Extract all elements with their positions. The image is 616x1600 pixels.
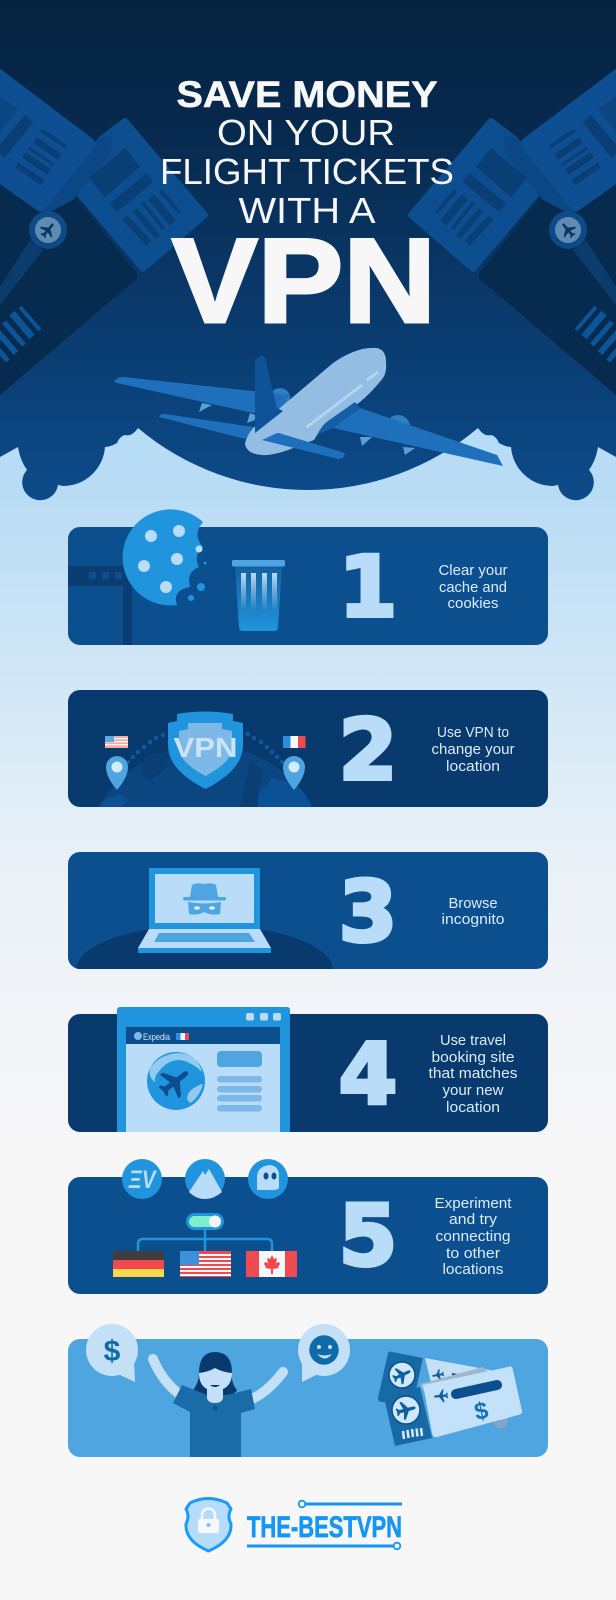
- step 1 text: cache and: [439, 579, 507, 596]
- step 3 text: [442, 895, 504, 928]
- step 5 text: [434, 1195, 512, 1278]
- step 5 text: locations: [442, 1261, 504, 1278]
- icon: globe with plane: [147, 1052, 205, 1110]
- Expedia logo: [134, 1032, 171, 1043]
- back ticket plane: [431, 1369, 445, 1381]
- panel: step 1: [68, 509, 548, 646]
- title: [160, 73, 454, 348]
- person celebrating: [153, 1352, 283, 1457]
- step 1 text: [438, 562, 508, 612]
- shirt: [173, 1385, 255, 1457]
- right boarding pass illustration: [411, 61, 616, 395]
- title: WITH A: [238, 190, 376, 231]
- step 4 text: location: [446, 1099, 500, 1116]
- step 5 text: Experiment: [434, 1195, 512, 1212]
- tail fin: [255, 355, 283, 433]
- icon: cookie: [123, 509, 206, 605]
- ticket fold band: [420, 1367, 488, 1392]
- browser window: [117, 1007, 290, 1132]
- title: VPN: [172, 214, 436, 348]
- step 4 text: Use travel: [440, 1032, 506, 1049]
- step 1 text: cookies: [448, 595, 498, 612]
- logo: The-BestVPN: [186, 1498, 402, 1551]
- step 2 text: change your: [432, 741, 515, 758]
- icon: ExpressVPN badge: ΞV: [128, 1166, 157, 1194]
- circuit line bottom: [247, 1543, 400, 1549]
- engines and fins: [199, 388, 415, 455]
- step 5 text: to other: [446, 1245, 500, 1262]
- plane badge bottom: [392, 1396, 420, 1424]
- front stabilizer: [262, 433, 345, 459]
- step 5 text: and try: [449, 1211, 498, 1228]
- dollar speech bubble: $: [104, 1335, 121, 1368]
- number 5: 5: [339, 1187, 397, 1285]
- rear ticket: [42, 121, 205, 269]
- face and neck: [199, 1368, 232, 1403]
- destination bar: [456, 1385, 497, 1394]
- panel: step 5: [68, 1159, 548, 1294]
- dollar speech bubble: [86, 1324, 138, 1382]
- number 2: 2: [339, 701, 397, 799]
- icon: trash bin: [232, 560, 285, 631]
- windows: [307, 372, 378, 427]
- stub barcode: [403, 1428, 422, 1439]
- icon: laptop: [138, 868, 271, 953]
- step 3 text: incognito: [442, 911, 504, 928]
- title: ON YOUR: [217, 112, 395, 153]
- dotted route: [126, 732, 284, 764]
- icon: mountain VPN badge: [185, 1159, 225, 1199]
- number 3: 3: [339, 863, 397, 961]
- icon: US flag: [105, 736, 128, 748]
- toggle switch: [186, 1213, 224, 1230]
- arms: [153, 1359, 283, 1400]
- step 4 text: [428, 1032, 518, 1116]
- number 4: 4: [339, 1025, 397, 1123]
- left boarding pass illustration: [0, 61, 205, 395]
- panel: step 4: [68, 1007, 548, 1132]
- plane badge: [29, 211, 67, 249]
- panel: result: [68, 1324, 548, 1457]
- right wing: [333, 408, 503, 466]
- browser frame: [68, 566, 132, 646]
- icon: ghost VPN badge: [248, 1159, 288, 1199]
- mouth: [210, 1385, 220, 1387]
- back stub: [378, 1352, 423, 1403]
- step 2 text: [432, 724, 515, 775]
- airplane illustration: [114, 348, 503, 466]
- collar button: [212, 1406, 218, 1410]
- step 2 text: location: [446, 758, 500, 775]
- icon: VPN shield: [168, 712, 243, 789]
- title: FLIGHT TICKETS: [160, 151, 454, 192]
- connection tree: [138, 1229, 272, 1251]
- header background with clouds: [0, 0, 616, 500]
- fuselage: [245, 348, 386, 455]
- step 5 text: connecting: [436, 1228, 510, 1245]
- icon: left location pin: [106, 756, 128, 790]
- panel: step 2: [68, 690, 548, 807]
- icon: VPN shield: VPN: [174, 732, 238, 763]
- page background: [0, 400, 616, 1600]
- wing root: [317, 402, 360, 435]
- back ticket bar: [452, 1373, 463, 1378]
- icon: German flag: [113, 1251, 164, 1277]
- icon: shield with lock: [186, 1498, 231, 1551]
- dark ticket panel: [0, 150, 137, 395]
- step 4 text: booking site: [432, 1049, 514, 1066]
- lower left stabilizer: [159, 414, 253, 439]
- icon: US flag: [180, 1251, 231, 1277]
- ticket plane icon: [434, 1389, 448, 1403]
- wordmark: THE-BESTVPN: [247, 1511, 402, 1544]
- left wing: [114, 377, 290, 413]
- step 3 text: Browse: [448, 895, 498, 912]
- ticket dollar sign: $: [472, 1397, 491, 1426]
- globe: [98, 750, 313, 807]
- beam from plane badge: [0, 240, 43, 305]
- step 2 text: Use VPN to: [437, 724, 509, 741]
- hair: [193, 1352, 237, 1395]
- back ticket: [425, 1358, 507, 1420]
- shadow: [493, 1418, 508, 1428]
- front ticket: [0, 61, 96, 212]
- barcode: [0, 307, 40, 361]
- icon: Canadian flag: [246, 1251, 297, 1277]
- icon: right location pin: [283, 756, 305, 790]
- icon: France flag: [283, 736, 306, 748]
- circuit line top: [299, 1501, 402, 1507]
- plane badge top: [389, 1362, 415, 1388]
- step 4 text: your new: [442, 1082, 504, 1099]
- icon: ExpressVPN badge: [122, 1159, 162, 1199]
- France flag small: [176, 1033, 189, 1040]
- step 4 text: that matches: [428, 1065, 518, 1082]
- title: SAVE MONEY: [176, 73, 438, 115]
- desk ellipse: [76, 930, 332, 969]
- panel: step 3: [68, 852, 548, 969]
- front ticket: [423, 1366, 522, 1437]
- number 1: 1: [339, 538, 397, 636]
- smiley speech bubble: [298, 1324, 350, 1382]
- step 1 text: Clear your: [438, 562, 508, 579]
- flight tickets: [378, 1352, 522, 1446]
- Expedia logo: Expedia: [143, 1032, 171, 1043]
- content blocks: [217, 1051, 262, 1112]
- front stub: [383, 1387, 432, 1446]
- icon: incognito spy: [183, 883, 226, 915]
